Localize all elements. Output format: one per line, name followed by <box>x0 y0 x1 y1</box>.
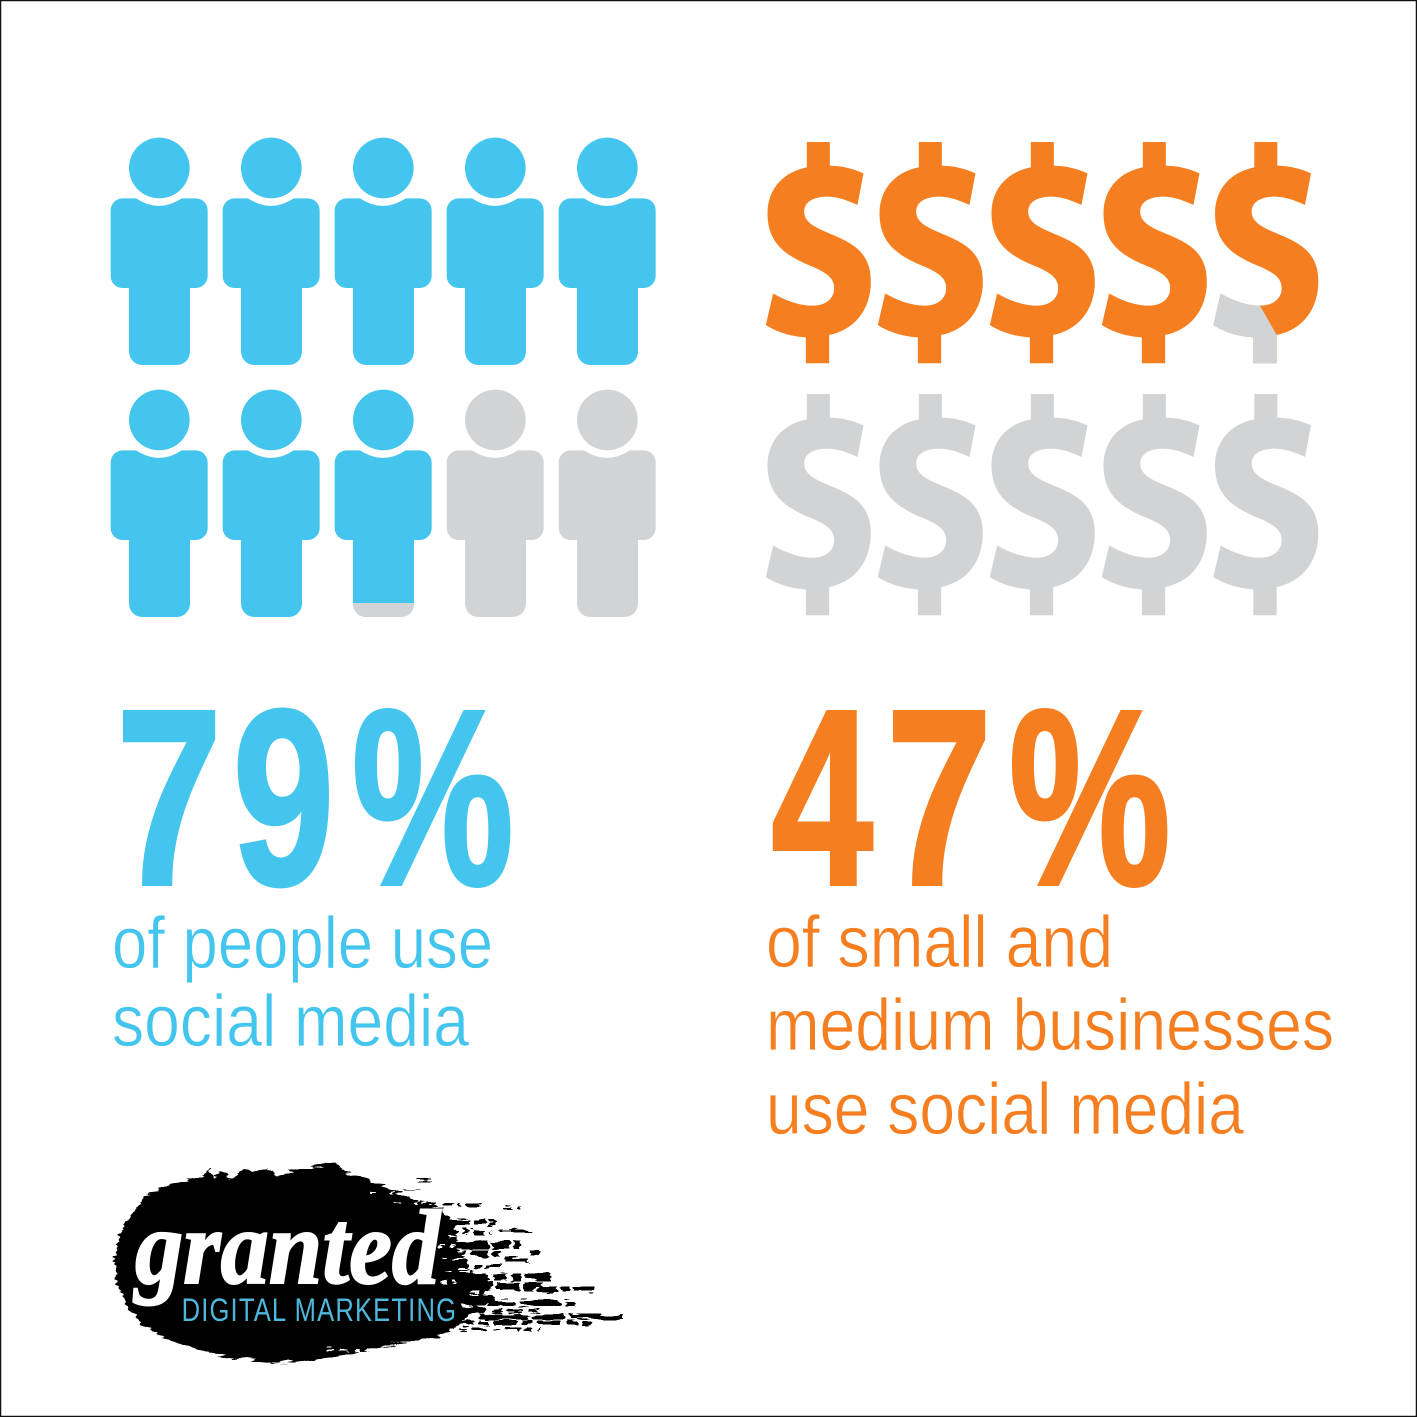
brush stroke <box>115 1164 622 1363</box>
stat: 47 percent <box>772 658 1171 937</box>
icon: dollar 10 gray <box>1213 394 1318 615</box>
icon: person 9 gray <box>447 390 544 617</box>
icon: dollar 9 gray <box>1102 394 1207 615</box>
icon: person 2 <box>223 138 320 365</box>
icon: dollar 6 gray <box>766 394 871 615</box>
icon: person 6 <box>111 390 208 617</box>
icon: person 4 <box>447 138 544 365</box>
icon: dollar 1 <box>766 142 871 363</box>
icon: dollar 4 <box>1102 142 1207 363</box>
text: of small and medium businesses use social media: of small and <box>766 902 1113 983</box>
icon: person 1 <box>111 138 208 365</box>
wordmark: granted: granted <box>133 1189 442 1306</box>
text: of small and medium businesses use social media <box>766 902 1334 1150</box>
stat: 47 percent: 7 <box>886 658 992 937</box>
text: of small and medium businesses use social media: medium businesses <box>766 985 1334 1066</box>
stat: 79 percent <box>116 658 514 937</box>
icon: dollar 7 gray <box>878 394 983 615</box>
panel: dollar pictogram <box>766 142 1318 615</box>
icon: person 8 partly filled <box>335 390 432 617</box>
icon: dollar 2 <box>878 142 983 363</box>
text: of people use social media <box>112 903 493 1062</box>
icon: person 5 <box>559 138 656 365</box>
stat: 79 percent: 7 <box>116 658 222 937</box>
icon: person 7 <box>223 390 320 617</box>
icon: person 10 gray <box>559 390 656 617</box>
icon: dollar 8 gray <box>990 394 1095 615</box>
icon: dollar 5 partly filled <box>1213 142 1318 363</box>
text: of small and medium businesses use social media: use social media <box>766 1069 1244 1150</box>
text: of people use social media: of people use <box>112 903 493 984</box>
stat: 47 percent: % <box>1009 658 1171 937</box>
stat: 79 percent: % <box>352 658 514 937</box>
stat: 47 percent: 4 <box>772 658 873 937</box>
stat: 79 percent: 9 <box>233 658 334 937</box>
icon: person 3 <box>335 138 432 365</box>
panel: people pictogram <box>111 138 656 617</box>
text: of people use social media: social media <box>112 981 469 1062</box>
icon: dollar 3 <box>990 142 1095 363</box>
logo: granted digital marketing <box>115 1164 622 1363</box>
tagline: digital marketing: DIGITAL MARKETING <box>182 1293 456 1329</box>
